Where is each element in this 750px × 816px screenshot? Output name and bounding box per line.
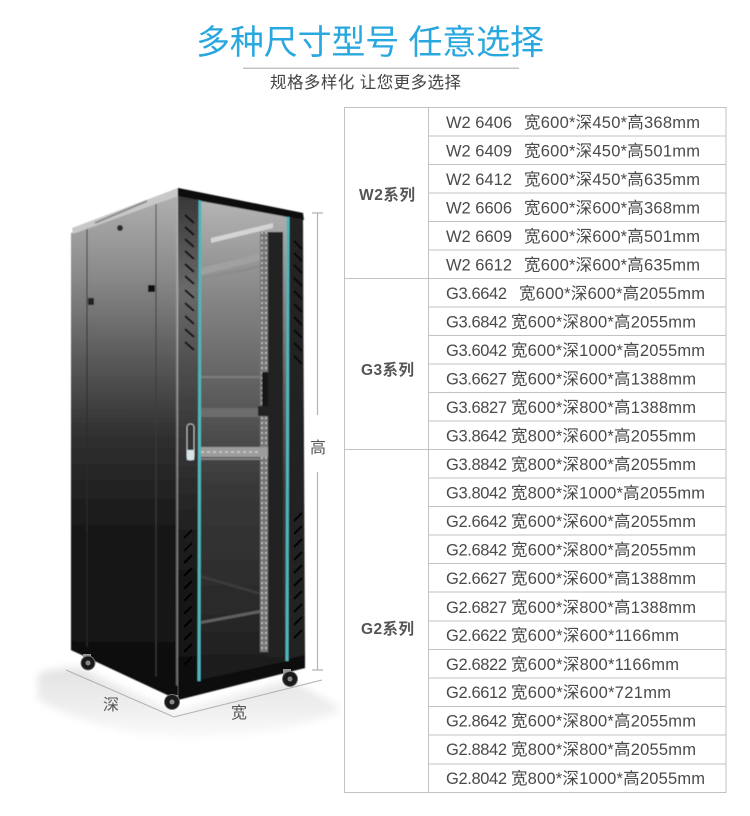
W2 rows: 宽600*深450*高635mm — [524, 170, 700, 189]
G3 rows: G3.6642 — [446, 285, 507, 303]
W2 rows: 宽600*深600*高368mm — [524, 198, 700, 218]
W2 rows: W2 6606 — [446, 200, 512, 218]
G3 rows: G3.6627 — [446, 370, 507, 388]
G2 rows: G2.8042 — [446, 770, 507, 788]
dimension: depth line and width line — [66, 670, 322, 717]
G2 rows: G3.8842 — [446, 456, 507, 474]
cabinet illustration — [38, 188, 340, 738]
G2 rows: G2.6842 — [446, 542, 507, 560]
G3 rows: 宽600*深600*高2055mm — [519, 284, 705, 303]
floor shadow — [38, 668, 340, 738]
G2 rows: 宽600*深600*721mm — [511, 683, 671, 702]
vent slots — [184, 215, 302, 665]
G3 rows: G3.8642 — [446, 428, 507, 446]
G3 rows — [446, 284, 705, 446]
G3 rows: G3.6827 — [446, 399, 507, 417]
G2 rows: 宽600*深800*高2055mm — [511, 540, 696, 560]
G3 rows: 宽600*深1000*高2055mm — [511, 341, 705, 360]
series label: G2: G2系列 — [361, 620, 414, 638]
title: 多种尺寸型号 任意选择 — [196, 24, 544, 62]
dimension: height line — [312, 213, 323, 670]
subtitle: 规格多样化 让您更多选择 — [270, 73, 462, 92]
G3 rows: 宽600*深600*高1388mm — [511, 370, 696, 388]
G2 rows: G3.8042 — [446, 484, 507, 502]
W2 rows: W2 6609 — [446, 228, 512, 246]
G2 rows: 宽800*深1000*高2055mm — [511, 769, 705, 788]
W2 rows: W2 6406 — [446, 114, 512, 132]
cabinet side panel — [71, 188, 178, 700]
G2 rows: G2.6627 — [446, 570, 507, 588]
G2 rows: G2.6827 — [446, 599, 507, 617]
W2 rows: 宽600*深450*高501mm — [524, 142, 700, 160]
W2 rows: W2 6412 — [446, 171, 512, 189]
series label: G3: G3系列 — [361, 361, 414, 379]
G3 rows: G3.6042 — [446, 342, 507, 360]
door handle — [187, 424, 194, 460]
G2 rows: 宽600*深600*高1388mm — [511, 569, 696, 588]
G3 rows: 宽600*深800*高1388mm — [511, 398, 696, 417]
G2 rows: 宽800*深1000*高2055mm — [511, 484, 705, 502]
G3 rows: G3.6842 — [446, 314, 507, 332]
G2 rows: 宽600*深600*高2055mm — [511, 512, 696, 531]
W2 rows: 宽600*深600*高635mm — [524, 256, 700, 274]
G2 rows: G2.6822 — [446, 656, 507, 674]
table grid — [344, 107, 726, 793]
G3 rows: 宽600*深800*高2055mm — [511, 312, 696, 332]
G2 rows: 宽800*深800*高2055mm — [511, 455, 696, 474]
G2 rows: G2.8642 — [446, 712, 507, 730]
G2 rows: 宽600*深800*高1388mm — [511, 598, 696, 617]
W2 rows: W2 6612 — [446, 256, 512, 274]
G2 rows: 宽600*深600*1166mm — [511, 626, 679, 645]
rack interior — [201, 253, 262, 275]
label: height: 高 — [310, 439, 326, 457]
G2 rows: G2.6612 — [446, 684, 507, 702]
G2 rows: G2.6642 — [446, 513, 507, 531]
W2 rows: 宽600*深450*高368mm — [524, 113, 700, 132]
G2 rows: G2.8842 — [446, 741, 507, 759]
W2 rows: W2 6409 — [446, 142, 512, 160]
G3 rows: 宽800*深600*高2055mm — [511, 426, 696, 446]
label: width: 宽 — [231, 704, 247, 722]
W2 rows — [446, 113, 700, 274]
G2 rows: 宽600*深800*高2055mm — [511, 712, 696, 730]
teal door trim — [198, 200, 202, 681]
G2 rows: 宽800*深800*高2055mm — [511, 740, 696, 759]
series label: W2: W2系列 — [359, 186, 415, 204]
G2 rows: G2.6622 — [446, 627, 507, 645]
G2 rows: 宽600*深800*1166mm — [511, 655, 679, 674]
W2 rows: 宽600*深600*高501mm — [524, 227, 700, 246]
casters — [81, 654, 298, 710]
glass door — [199, 201, 287, 680]
title underline — [243, 68, 519, 69]
G2 rows — [446, 455, 705, 788]
cabinet front door — [178, 188, 305, 700]
size table — [344, 107, 726, 793]
label: depth: 深 — [103, 696, 119, 714]
